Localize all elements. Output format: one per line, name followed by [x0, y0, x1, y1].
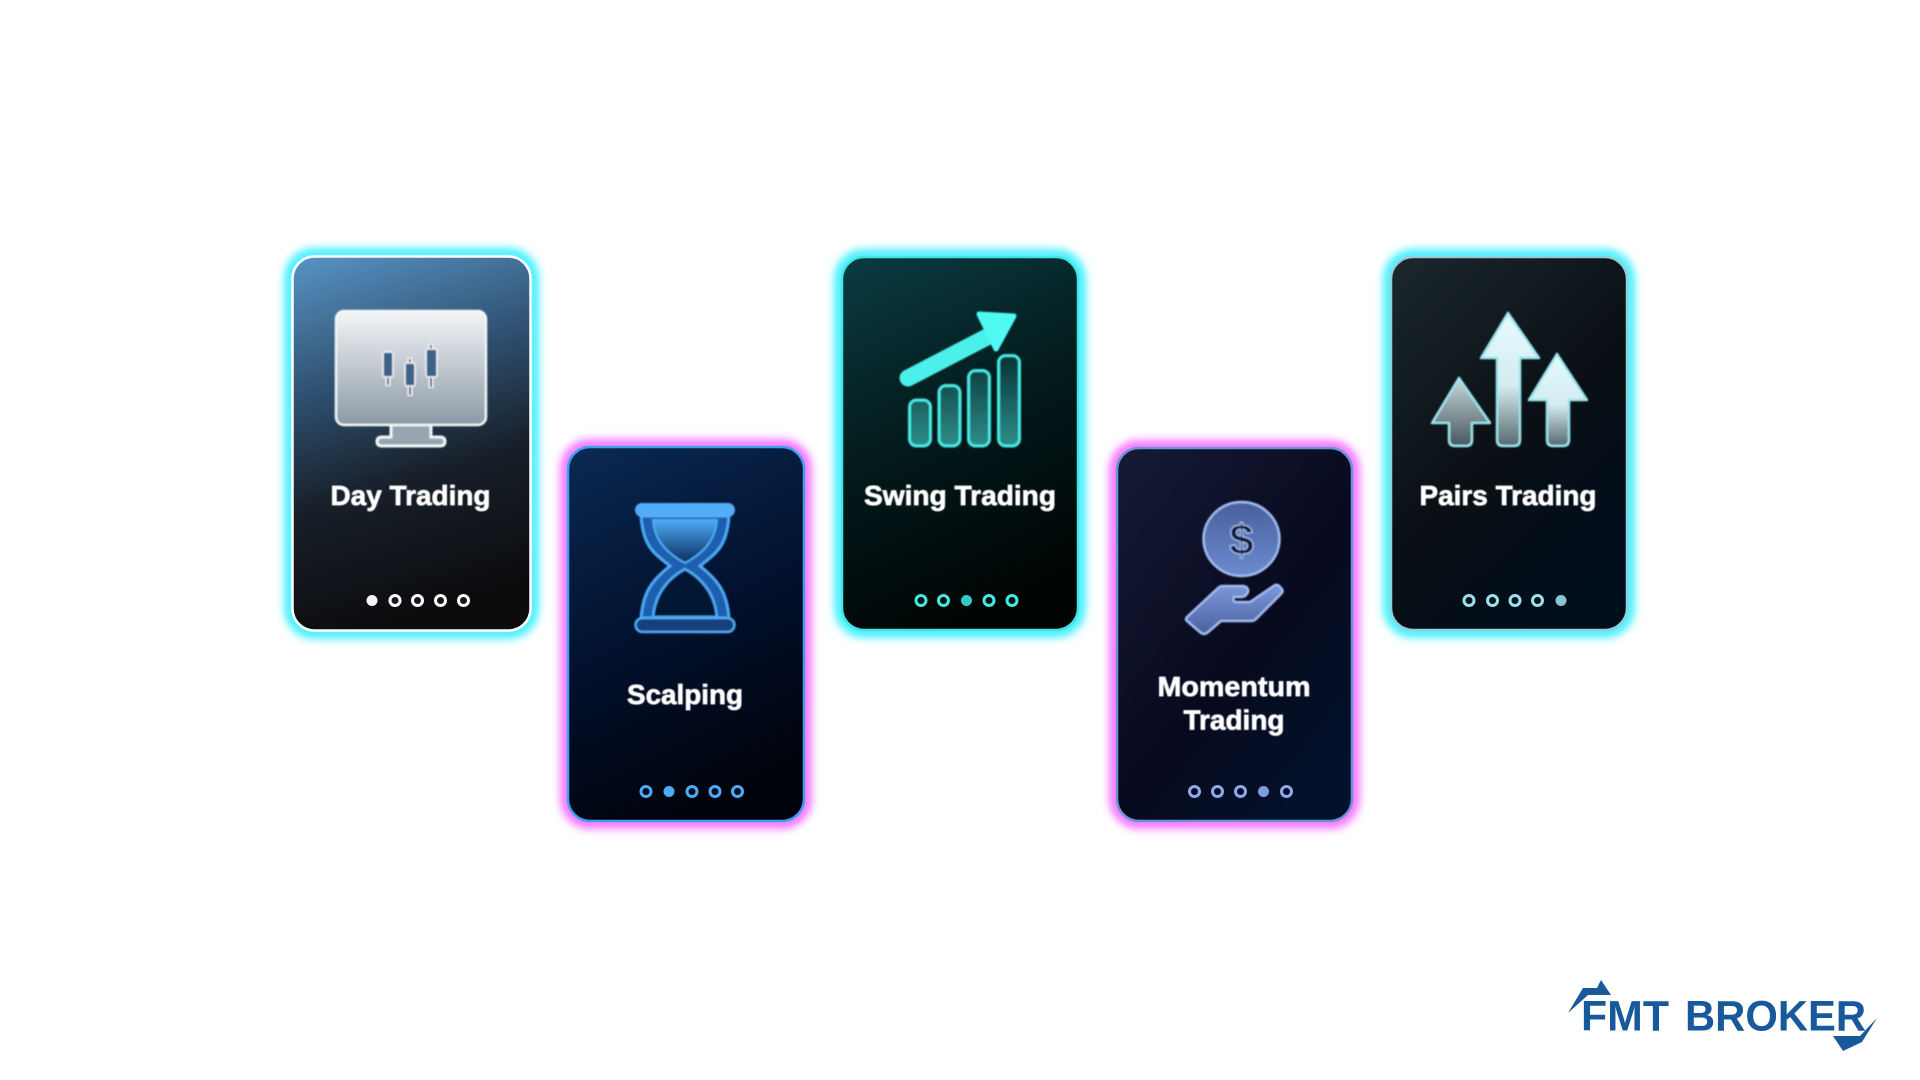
logo roof arrow	[1568, 980, 1611, 1013]
panel: Momentum Trading card	[1115, 446, 1354, 823]
heading: Swing Trading: Swing Trading	[864, 480, 1056, 511]
icon: coin over hand: $	[1229, 516, 1254, 565]
pagination dots	[366, 595, 468, 606]
heading: Pairs Trading: Pairs Trading	[1420, 480, 1596, 511]
icon: three up arrows	[1432, 313, 1587, 446]
heading: Momentum Trading: Trading	[1184, 704, 1284, 736]
heading: Momentum Trading	[1158, 671, 1310, 736]
logo check mark	[1833, 1018, 1877, 1051]
panel: Day Trading card	[290, 254, 533, 633]
icon: coin over hand	[1186, 502, 1282, 634]
heading: Scalping: Scalping	[627, 679, 743, 710]
panel: Swing Trading card	[840, 255, 1080, 632]
icon: hourglass	[635, 503, 735, 632]
heading: Day Trading: Day Trading	[330, 480, 490, 511]
heading: Momentum Trading: Momentum	[1158, 671, 1310, 702]
logo wordmark: BROKER	[1685, 992, 1866, 1040]
panel: Scalping card	[566, 445, 806, 823]
panel: Pairs Trading card	[1389, 255, 1629, 632]
logo wordmark	[1581, 992, 1866, 1040]
pagination dots	[1464, 595, 1566, 606]
icon: rising bars and arrow	[908, 314, 1020, 446]
pagination dots	[1190, 786, 1292, 797]
pagination dots	[916, 595, 1017, 606]
logo: FMT Broker	[1568, 980, 1877, 1051]
pagination dots	[641, 786, 742, 797]
logo wordmark: FMT	[1581, 992, 1669, 1040]
icon: monitor with candlesticks	[336, 311, 486, 446]
